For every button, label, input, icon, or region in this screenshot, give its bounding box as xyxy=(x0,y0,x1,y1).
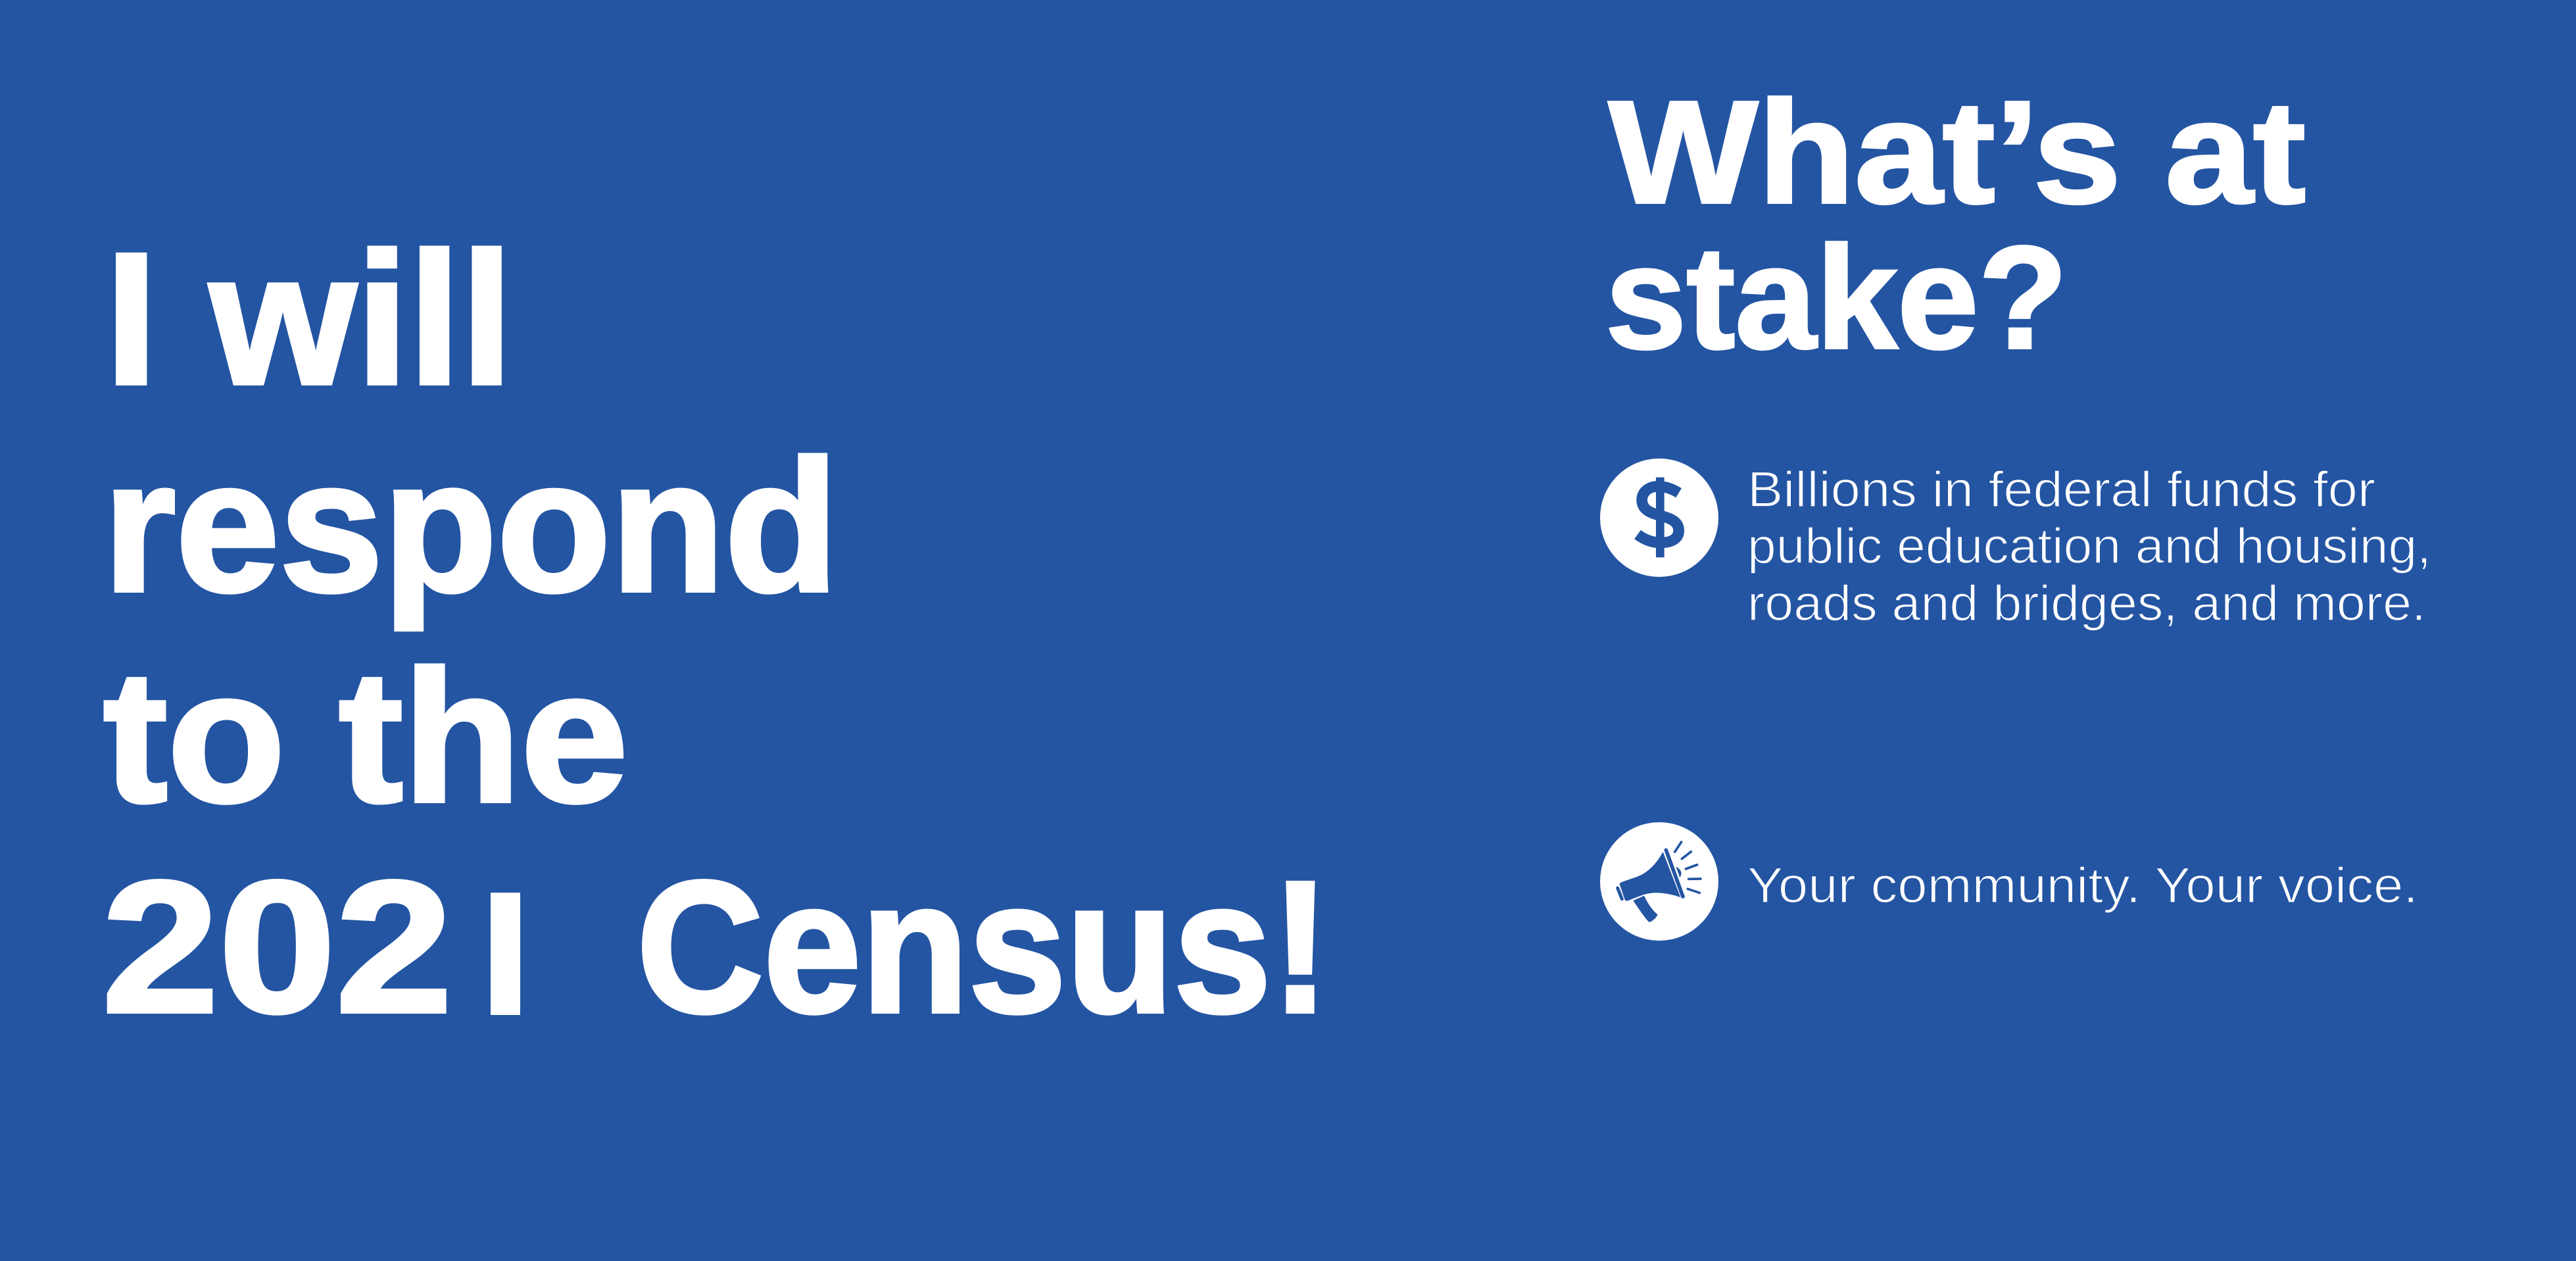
headline: I will respond to the 2021 Census!: Census! xyxy=(637,843,1330,1052)
icon: dollar coin xyxy=(1600,458,1718,577)
headline: I will respond to the 2021 Census!: 202 xyxy=(102,843,452,1052)
icon: megaphone xyxy=(1600,822,1718,941)
headline: I will respond to the 2021 Census!: respond xyxy=(103,422,838,631)
heading: What's at stake?: stake? xyxy=(1605,216,2068,380)
text: federal funds xyxy=(1747,462,2431,631)
heading: What's at stake? xyxy=(1605,71,2306,380)
headline: I will respond to the 2021 Census! xyxy=(102,214,1330,1052)
headline: I will respond to the 2021 Census!: to the xyxy=(103,632,628,841)
text: federal funds: roads and bridges, and more. xyxy=(1747,576,2426,631)
text: federal funds: Billions in federal funds for xyxy=(1747,462,2375,518)
heading: What's at stake?: What’s at xyxy=(1609,71,2306,234)
text: federal funds: public education and housing, xyxy=(1747,518,2431,574)
text: your community, your voice: Your community. Your voice. xyxy=(1747,858,2418,914)
headline: I will respond to the 2021 Census!: I will xyxy=(105,214,513,424)
